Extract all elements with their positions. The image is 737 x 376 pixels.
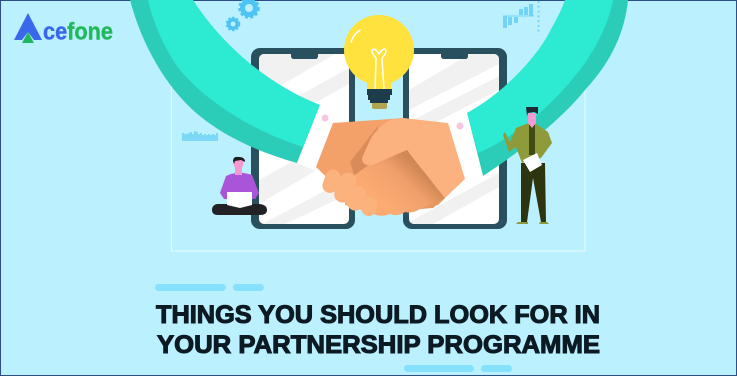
left arm (130, 0, 320, 163)
title (156, 301, 600, 359)
title: YOUR PARTNERSHIP PROGRAMME (157, 331, 600, 359)
icon: wave chart (183, 131, 217, 141)
right arm (467, 0, 628, 176)
icon: top bar chart (503, 1, 538, 35)
handshake (316, 118, 465, 218)
seated person with laptop (212, 157, 267, 215)
right phone (403, 48, 507, 229)
standing person with paper (503, 107, 552, 224)
title: THINGS YOU SHOULD LOOK FOR IN (156, 301, 600, 329)
light bulb (344, 15, 414, 109)
left shirt cuff (297, 105, 336, 172)
accent bars top (155, 284, 264, 291)
gap between phones (355, 48, 403, 133)
right shirt cuff (446, 113, 483, 183)
accent bars bottom (404, 365, 512, 372)
logo: Acefone: cefone (43, 18, 113, 46)
icon: gears (227, 0, 258, 30)
logo: Acefone (14, 13, 113, 46)
frame outline (172, 0, 585, 251)
left phone (251, 48, 355, 229)
